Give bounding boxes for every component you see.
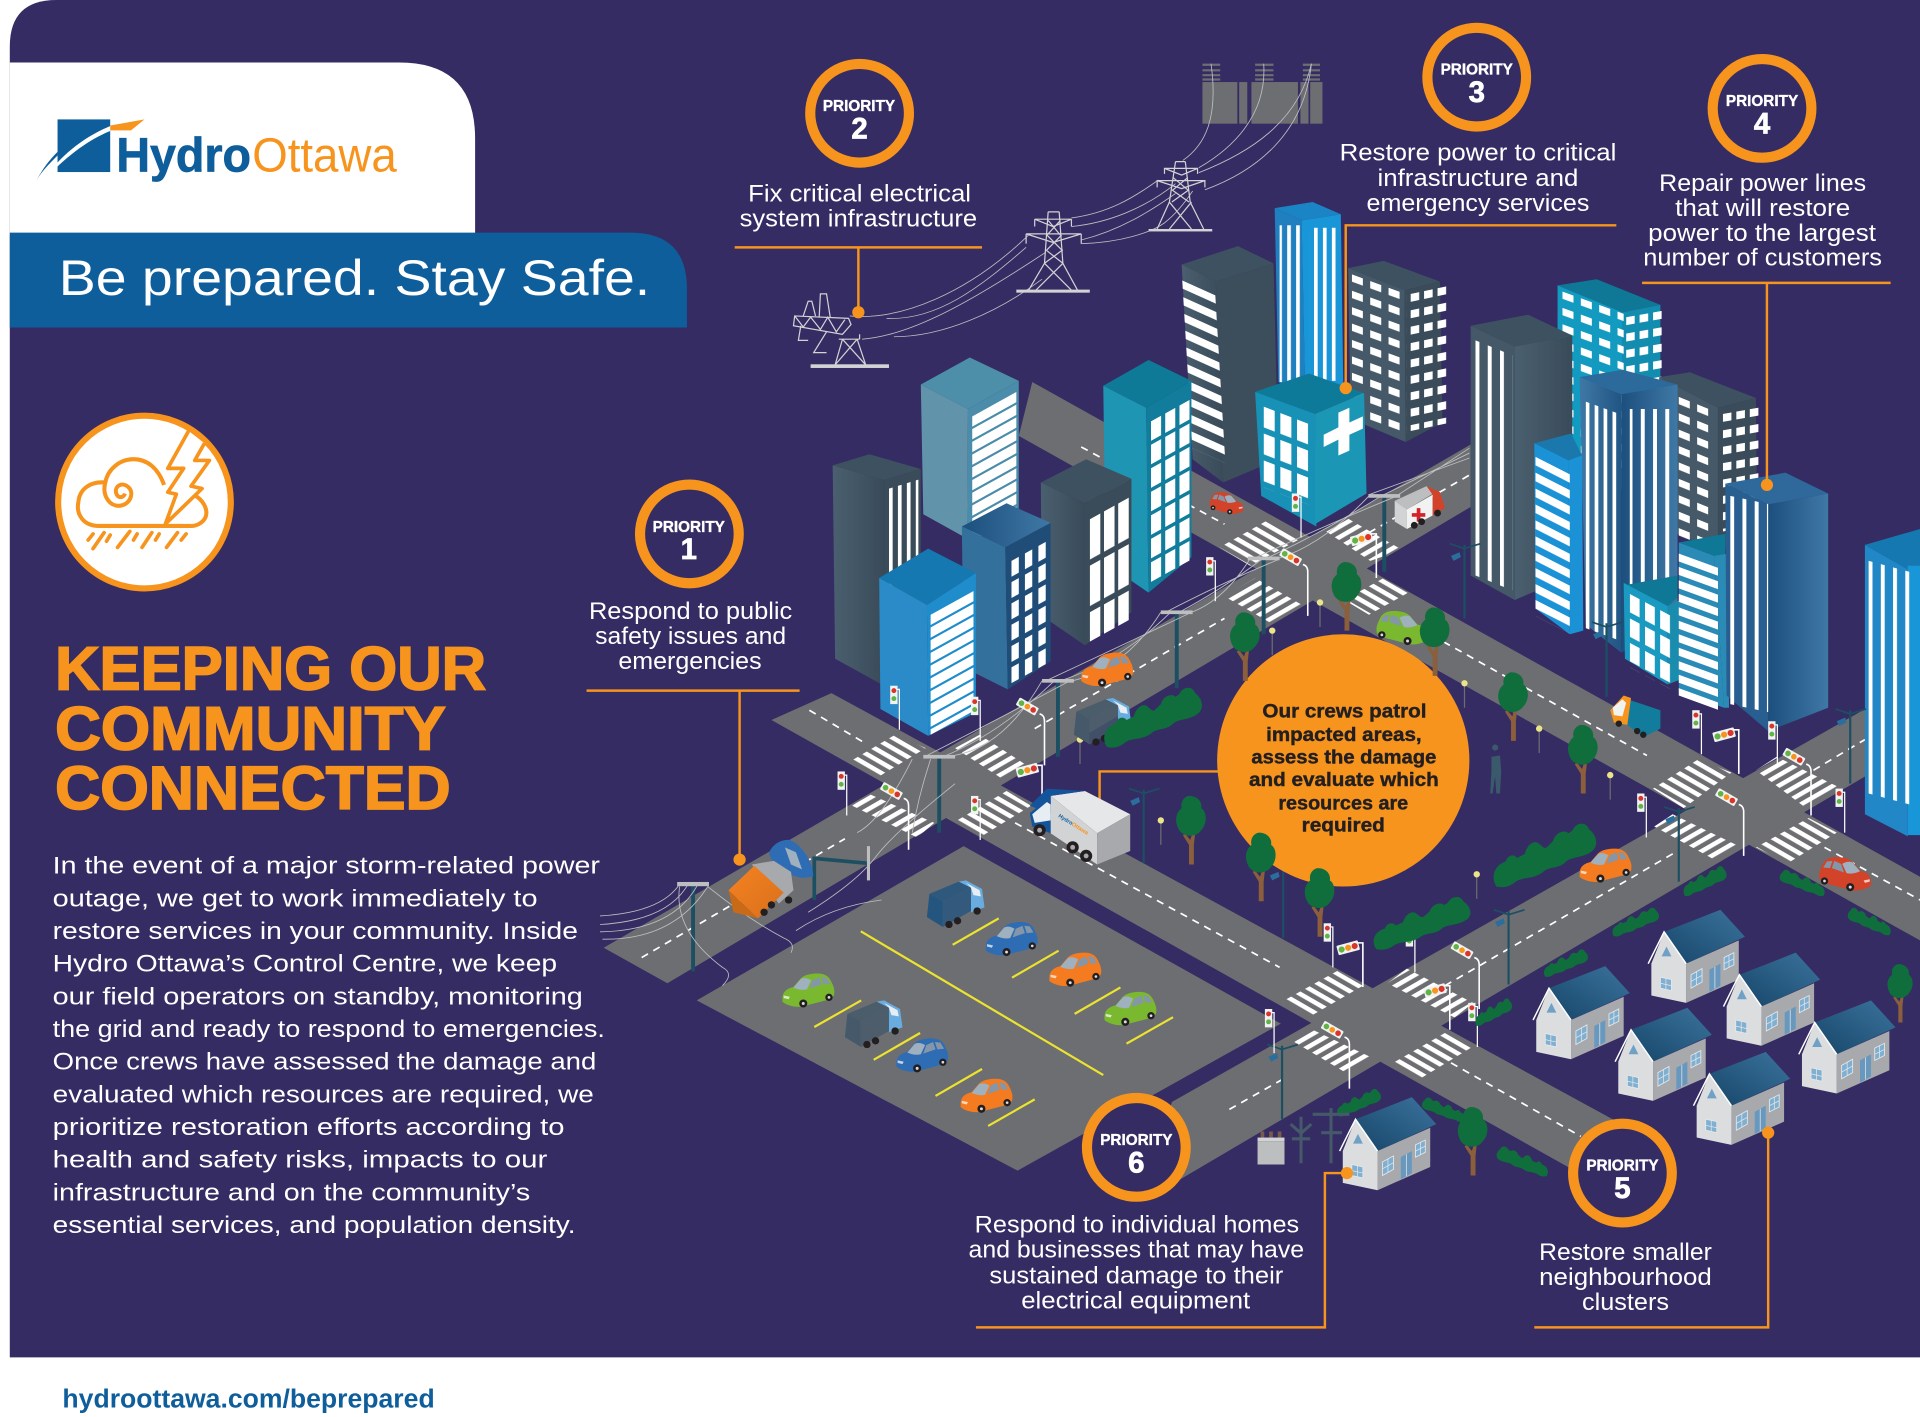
buildings: left block — [833, 358, 1193, 736]
buildings: right block — [1471, 279, 1920, 836]
text block: intro paragraph — [53, 853, 605, 1239]
bushes — [1104, 688, 1891, 1176]
vehicle: Hydro Ottawa truck: HydroOttawa — [1057, 813, 1090, 837]
building: dark windowed behind — [1659, 372, 1760, 553]
priority 5 badge: 5 — [1614, 1172, 1631, 1205]
vehicle: overturned orange truck — [729, 861, 793, 918]
text block: intro paragraph: Hydro Ottawa’s Control Centre, we keep — [53, 951, 557, 978]
priority 2 leader — [735, 247, 982, 318]
banner: Be prepared. Stay Safe.: Be prepared. Stay Safe. — [59, 250, 650, 306]
priority 5 text: clusters — [1582, 1289, 1669, 1316]
building: teal windowed — [1103, 360, 1193, 593]
electrical equipment: transformer and poles — [1258, 1108, 1349, 1164]
text block: intro paragraph: restore services in your community. Inside — [53, 918, 578, 945]
priority 4 badge — [1713, 59, 1811, 158]
text block: intro paragraph: infrastructure and on the community’s — [53, 1179, 530, 1206]
text block: intro paragraph: essential services, and population density. — [53, 1212, 576, 1239]
building: dark striped tower — [1182, 246, 1278, 482]
parking lot — [697, 846, 1281, 1171]
priority 1 leader — [587, 691, 800, 866]
priority 1 text: emergencies — [618, 648, 762, 675]
text block: intro paragraph: evaluated which resources are required, we — [53, 1081, 594, 1108]
building: blue right edge — [1865, 529, 1920, 836]
building: teal small windowed — [1624, 576, 1680, 689]
text block: intro paragraph: In the event of a major storm-related power — [53, 853, 600, 880]
building: blue striped tower — [1275, 202, 1343, 398]
priority 3 text: emergency services — [1367, 190, 1589, 217]
priority 1 text — [589, 598, 792, 675]
panel: logo card — [10, 62, 475, 235]
vehicle: Hydro Ottawa truck — [1030, 789, 1130, 864]
utility poles and wires — [600, 448, 1469, 986]
banner: Be prepared. Stay Safe. — [10, 233, 687, 328]
priority 2 text: system infrastructure — [740, 206, 977, 233]
priority 6 text: sustained damage to their — [989, 1262, 1283, 1289]
priority 3 text: Restore power to critical — [1340, 139, 1616, 166]
traffic signals — [838, 493, 1845, 1089]
icon: transmission tower 2 — [1016, 212, 1090, 293]
priority 2 text — [740, 180, 977, 233]
priority 2 text: Fix critical electrical — [748, 180, 971, 207]
priority 2 badge: PRIORITY — [823, 98, 895, 115]
crosswalks — [850, 518, 1837, 1080]
priority 4 text — [1643, 170, 1882, 272]
priority 4 badge: 4 — [1754, 107, 1771, 140]
building: navy windowed — [962, 503, 1051, 689]
logo: Hydro Ottawa: Hydro — [116, 129, 251, 182]
orange callout: crews patrol: assess the damage — [1251, 746, 1436, 768]
text block: intro paragraph: our field operators on standby, monitoring — [53, 983, 583, 1010]
orange callout: crews patrol: impacted areas, — [1266, 724, 1422, 746]
icon: storm cloud — [58, 416, 231, 588]
road vehicles — [729, 486, 1871, 918]
text block: intro paragraph: outage, we get to work immediately to — [53, 885, 538, 912]
vehicle: crashed car — [769, 840, 813, 878]
priority 5 badge: PRIORITY — [1586, 1158, 1659, 1175]
priority 2 badge — [810, 64, 909, 163]
priority 3 badge — [1427, 28, 1526, 127]
priority 6 badge: PRIORITY — [1100, 1132, 1173, 1149]
priority 5 leader — [1534, 1127, 1774, 1327]
logo: Hydro Ottawa — [37, 119, 397, 182]
icon: transmission tower 3 — [1149, 162, 1212, 231]
priority 5 text — [1539, 1239, 1712, 1316]
priority 6 leader — [976, 1167, 1353, 1327]
text block: intro paragraph: Once crews have assessed the damage and — [53, 1049, 596, 1076]
building: dark tall windows — [1041, 459, 1131, 645]
priority 6 text: and businesses that may have — [969, 1237, 1304, 1264]
priority 5 badge — [1573, 1124, 1672, 1222]
person silhouette — [1490, 745, 1501, 793]
priority 4 badge: PRIORITY — [1726, 93, 1799, 110]
footer url: hydroottawa.com/beprepared — [62, 1386, 435, 1414]
priority 5 text: Restore smaller — [1539, 1239, 1712, 1266]
building: blue front — [879, 549, 976, 736]
building: blue small striped — [1534, 433, 1583, 634]
building: teal striped — [1679, 534, 1729, 710]
priority 4 text: Repair power lines — [1659, 170, 1866, 197]
building: dark far left — [833, 454, 921, 686]
buildings: central back block — [1182, 202, 1447, 527]
individual house — [1340, 1097, 1436, 1190]
priority 6 badge: 6 — [1128, 1146, 1144, 1179]
orange callout: crews patrol: required — [1302, 814, 1385, 836]
city roads — [604, 382, 1920, 1188]
vehicle: small delivery truck — [1610, 696, 1660, 738]
priority 6 text: Respond to individual homes — [975, 1211, 1299, 1238]
power transmission: substation — [1183, 64, 1322, 190]
priority 5 text: neighbourhood — [1539, 1264, 1712, 1291]
priority 6 badge — [1087, 1098, 1186, 1197]
priority 3 badge: 3 — [1469, 76, 1485, 109]
priority 4 text: number of customers — [1643, 245, 1882, 272]
priority 1 badge: PRIORITY — [653, 519, 725, 536]
building: dark tall stripes — [1471, 315, 1572, 600]
priority 6 text: electrical equipment — [1021, 1287, 1251, 1314]
orange callout: crews patrol: and evaluate which — [1249, 769, 1439, 791]
priority 3 text: infrastructure and — [1378, 165, 1578, 192]
orange callout: crews patrol: resources are — [1278, 792, 1408, 814]
priority 1 badge: 1 — [681, 533, 697, 566]
priority 2 badge: 2 — [851, 112, 868, 145]
heading: Keeping our community connected: CONNECTED — [55, 754, 451, 822]
text block: intro paragraph: prioritize restoration efforts according to — [53, 1114, 564, 1141]
priority 4 leader — [1642, 283, 1891, 491]
trees — [1176, 562, 1913, 1176]
building: hospital — [1255, 373, 1367, 527]
priority 1 badge — [640, 485, 739, 583]
priority 6 text — [969, 1211, 1304, 1314]
icon: collapsed tower — [793, 294, 889, 368]
building: teal far — [1558, 279, 1663, 490]
priority 4 text: power to the largest — [1648, 220, 1876, 247]
building: dark windowed block — [1348, 261, 1447, 442]
priority 1 text: Respond to public — [589, 598, 792, 625]
priority 4 text: that will restore — [1675, 195, 1850, 222]
orange callout: crews patrol — [1100, 634, 1469, 887]
text block: intro paragraph: the grid and ready to respond to emergencies. — [53, 1016, 605, 1043]
building: light blue — [921, 358, 1019, 544]
neighbourhood houses — [1533, 910, 1896, 1145]
vehicle: ambulance — [1395, 486, 1445, 529]
priority 1 text: safety issues and — [595, 623, 786, 650]
priority 3 badge: PRIORITY — [1441, 62, 1513, 79]
building: blue big front — [1725, 473, 1828, 731]
priority 3 text — [1340, 139, 1616, 217]
heading: Keeping our community connected: COMMUNITY — [55, 694, 446, 762]
street lamps and cameras — [1077, 544, 1866, 1119]
building: blue tall stripes — [1580, 370, 1678, 653]
text block: intro paragraph: health and safety risks, impacts to our — [53, 1147, 547, 1174]
logo: Hydro Ottawa: Ottawa — [252, 129, 397, 182]
power lines between towers — [850, 180, 1193, 339]
heading: Keeping our community connected — [55, 634, 486, 822]
heading: Keeping our community connected: KEEPING OUR — [55, 634, 486, 702]
orange callout: crews patrol: Our crews patrol — [1262, 701, 1427, 723]
priority 3 leader — [1340, 225, 1616, 394]
